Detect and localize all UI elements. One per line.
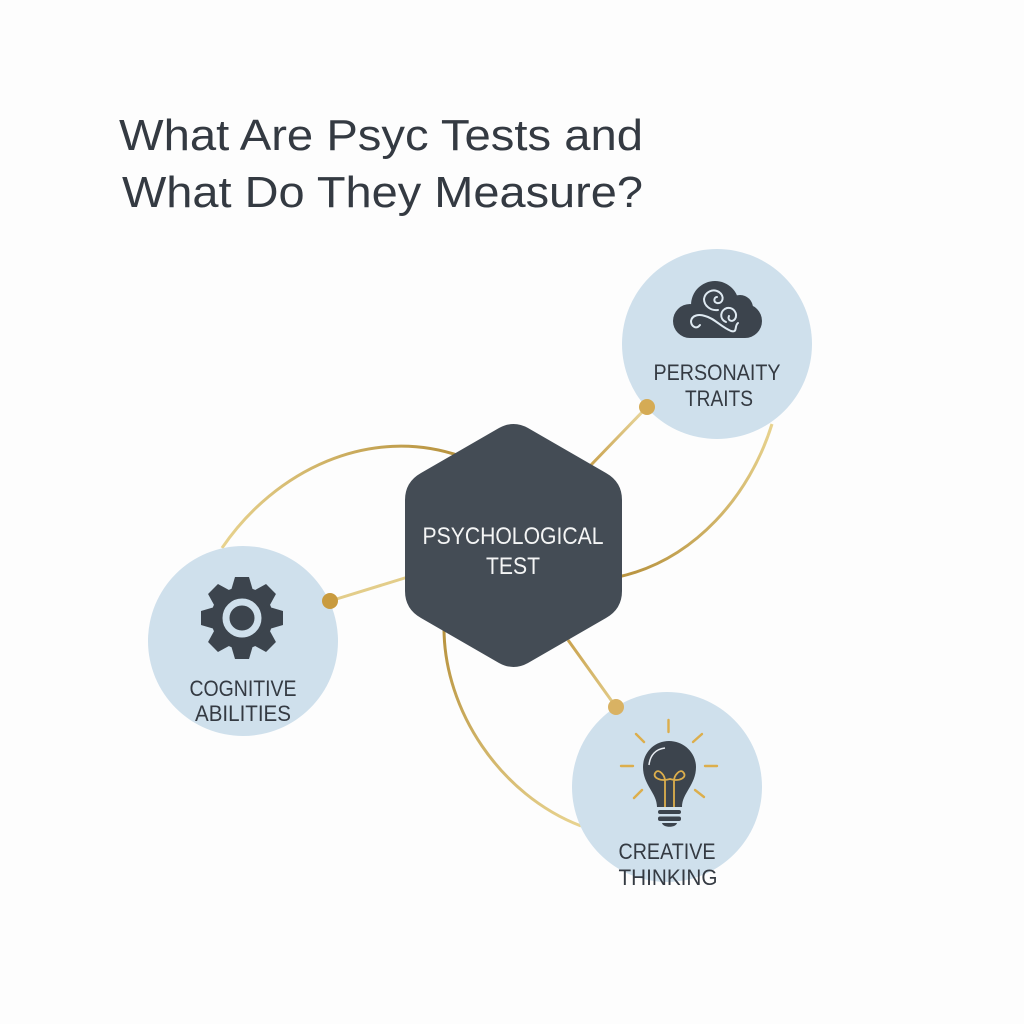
- label: cognitive abilities: COGNITIVE: [190, 676, 296, 701]
- curved connector: creative thinking to centre: [444, 628, 581, 826]
- panel: cognitive abilities: [148, 546, 338, 736]
- label: psychological test: TEST: [486, 553, 540, 580]
- label: cognitive abilities: ABILITIES: [195, 701, 291, 726]
- label: creative thinking: [618, 839, 718, 890]
- icon: cloud with swirls: [673, 281, 762, 338]
- label: creative thinking: THINKING: [618, 865, 718, 890]
- straight connector: centre to cognitive dot: [330, 577, 408, 601]
- panel: personality traits: [622, 249, 812, 439]
- connector dot: creative: [608, 699, 624, 715]
- label: personality traits: TRAITS: [685, 386, 753, 411]
- label: psychological test: PSYCHOLOGICAL: [422, 523, 604, 550]
- label: personality traits: PERSONAITY: [654, 360, 781, 385]
- title: [119, 111, 643, 217]
- panel: creative thinking: [572, 692, 762, 890]
- curved connector: cognitive abilities to centre: [222, 446, 460, 548]
- title: What Do They Measure?: [122, 168, 643, 217]
- label: cognitive abilities: [190, 676, 296, 726]
- label: personality traits: [654, 360, 781, 411]
- central hexagon: [405, 424, 622, 667]
- straight connector: centre to creative dot: [568, 640, 616, 707]
- label: creative thinking: CREATIVE: [618, 839, 716, 864]
- label: psychological test: [422, 523, 604, 580]
- straight connector: centre to personality dot: [590, 407, 647, 466]
- curved connector: personality traits to centre: [618, 424, 772, 577]
- title: What Are Psyc Tests and: [119, 111, 643, 160]
- connector dot: cognitive: [322, 593, 338, 609]
- connector dot: personality: [639, 399, 655, 415]
- icon: light bulb: [621, 720, 717, 827]
- icon: gear: [201, 577, 283, 659]
